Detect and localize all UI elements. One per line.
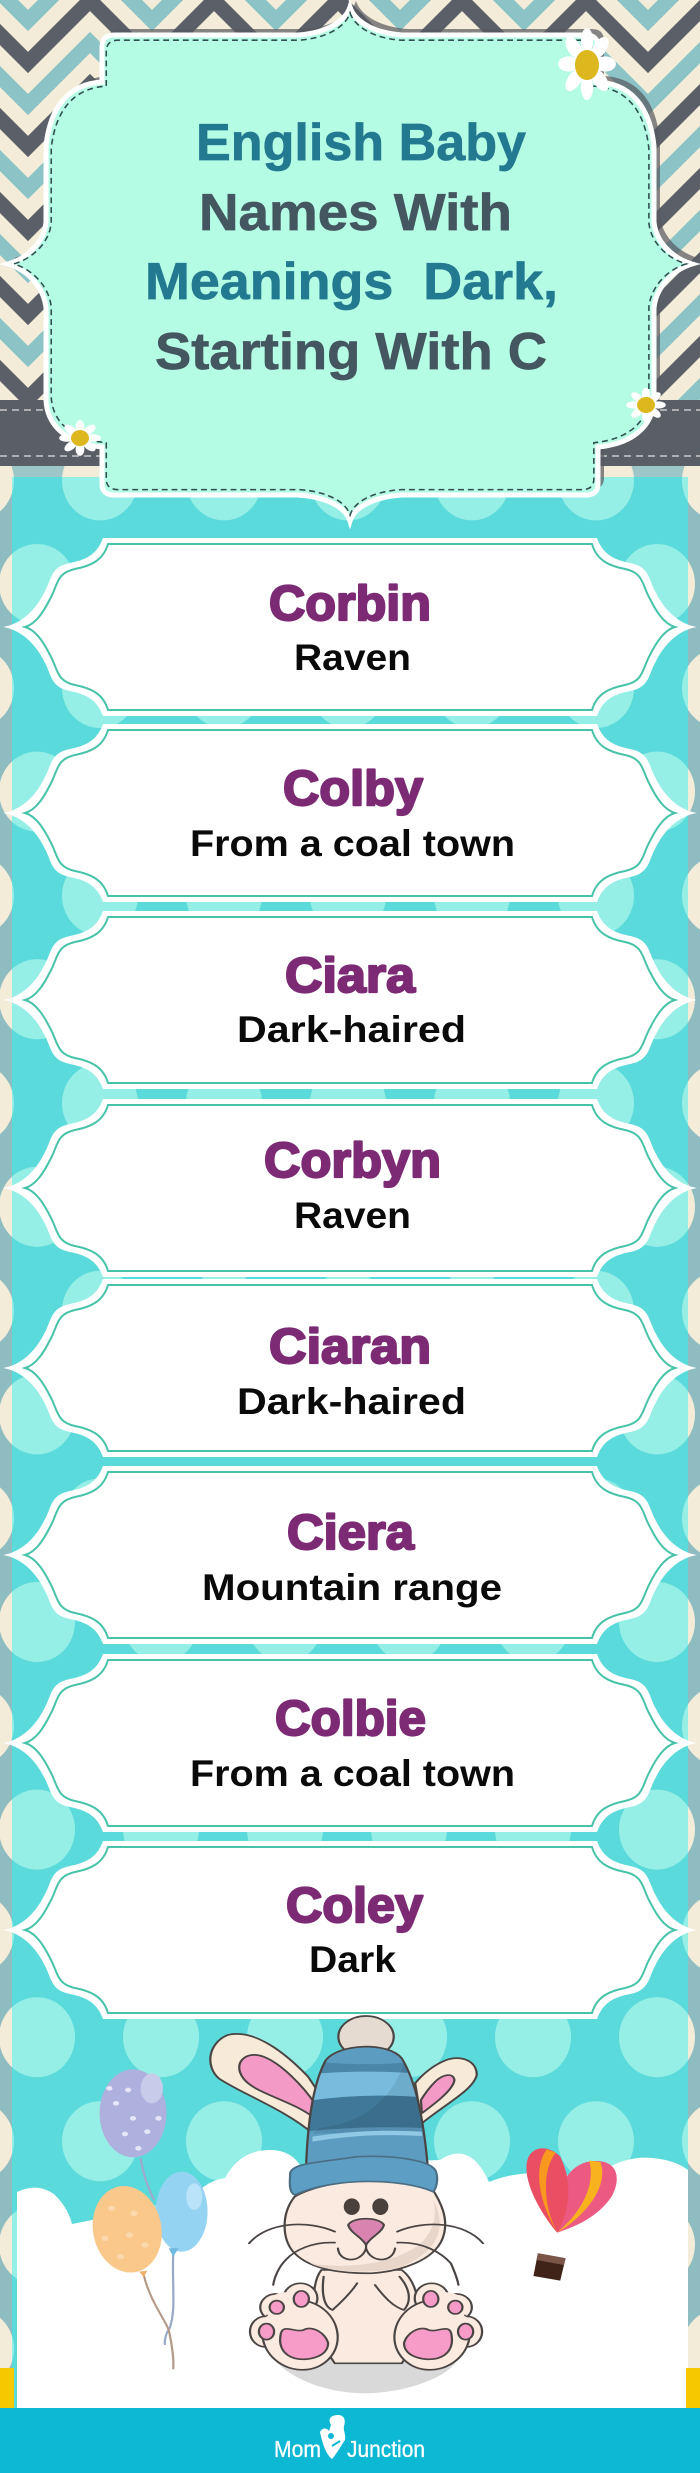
- card: Ciara: Ciara: [285, 949, 416, 1003]
- icon: large daisy: [558, 28, 616, 100]
- card: Coley: [3, 1841, 697, 2019]
- card: Colby: From a coal town: [190, 823, 515, 864]
- background: polka dot panel: [0, 466, 700, 2408]
- icon: right daisy: [626, 388, 666, 422]
- card: Ciaran: Ciaran: [269, 1320, 431, 1374]
- icon: bunny in a knit hat: [210, 2016, 483, 2393]
- grey stitched band: [0, 400, 700, 466]
- card: Ciara: Dark-haired: [237, 1009, 466, 1050]
- card: Ciaran: Dark-haired: [237, 1381, 466, 1422]
- title: Names With: [199, 184, 512, 242]
- title: Meanings Dark,: [145, 253, 558, 311]
- card: Ciera: Mountain range: [202, 1567, 502, 1608]
- logo: MomJunction: Mom: [274, 2436, 321, 2462]
- illustration group (drawn in 2.24x / 3x crop space): [88, 2016, 617, 2393]
- card: Corbyn: [3, 1099, 697, 1277]
- white cloud ground: [17, 2150, 688, 2408]
- logo: MomJunction: [274, 2415, 425, 2462]
- card: Corbyn: Raven: [294, 1195, 411, 1236]
- card: Corbyn: Corbyn: [264, 1134, 441, 1188]
- card: Ciera: [3, 1466, 697, 1644]
- card: Colby: Colby: [283, 762, 423, 816]
- card: Corbin: Corbin: [269, 577, 431, 631]
- card: Colbie: Colbie: [275, 1692, 426, 1746]
- card: Colby: [3, 724, 697, 902]
- title: Starting With C: [155, 323, 547, 381]
- card: Ciaran: [3, 1279, 697, 1457]
- card: Corbin: [3, 538, 697, 716]
- card: Colbie: [3, 1654, 697, 1832]
- icon: left daisy: [59, 420, 101, 456]
- background: chevron header: [0, 0, 700, 400]
- yellow corner strips: [0, 2368, 700, 2408]
- footer bar: [0, 2408, 700, 2473]
- card: Coley: Dark: [309, 1939, 396, 1980]
- card: Corbin: Raven: [294, 637, 411, 678]
- panel: title plaque: [8, 1, 698, 521]
- card: Colbie: From a coal town: [190, 1753, 515, 1794]
- card: Ciara: [3, 911, 697, 1089]
- card: Coley: Coley: [286, 1879, 423, 1933]
- balloons: [88, 2069, 208, 2369]
- card: Ciera: Ciera: [287, 1506, 415, 1560]
- logo: MomJunction: Junction: [347, 2436, 425, 2462]
- title: English Baby: [196, 114, 526, 172]
- icon: heart hot air balloon: [526, 2148, 617, 2281]
- title: [145, 114, 558, 381]
